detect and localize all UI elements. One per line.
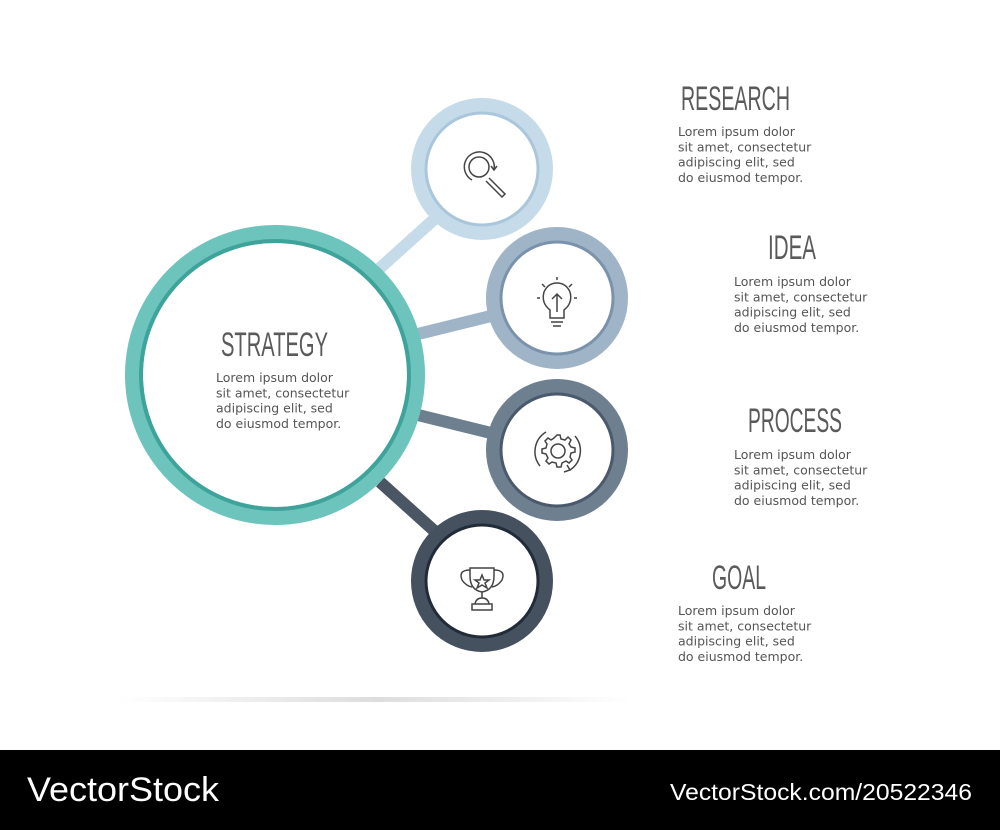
text: strategy: adipiscing elit, sed xyxy=(216,401,333,416)
heading: research: RESEARCH xyxy=(681,80,790,118)
text: strategy: do eiusmod tempor. xyxy=(216,416,341,431)
text: idea: sit amet, consectetur xyxy=(734,289,868,304)
text: research: sit amet, consectetur xyxy=(678,139,812,154)
heading: strategy: STRATEGY xyxy=(221,326,328,364)
footer logo: VectorStock xyxy=(27,771,220,809)
connector: idea xyxy=(418,315,495,334)
text: process: adipiscing elit, sed xyxy=(734,478,851,493)
text: goal: sit amet, consectetur xyxy=(678,618,812,633)
heading: process: PROCESS xyxy=(748,402,842,440)
connector: process xyxy=(418,415,495,434)
text: strategy: Lorem ipsum dolor xyxy=(216,370,334,385)
text: research: Lorem ipsum dolor xyxy=(678,124,796,139)
circle: goal xyxy=(419,518,545,644)
icon: trophy xyxy=(461,568,503,610)
text: idea: adipiscing elit, sed xyxy=(734,305,851,320)
heading: goal: GOAL xyxy=(712,559,766,597)
footer bar xyxy=(0,750,1000,830)
text: goal: Lorem ipsum dolor xyxy=(678,603,796,618)
text: strategy: sit amet, consectetur xyxy=(216,385,350,400)
text: research: do eiusmod tempor. xyxy=(678,170,803,185)
connector: research xyxy=(380,214,440,268)
text: idea: do eiusmod tempor. xyxy=(734,320,859,335)
icon: bulb xyxy=(537,277,577,326)
text: process: sit amet, consectetur xyxy=(734,462,868,477)
text: process: do eiusmod tempor. xyxy=(734,493,859,508)
footer url: VectorStock.com/20522346 xyxy=(670,779,972,805)
circle: research xyxy=(419,106,545,232)
shadow xyxy=(120,697,630,702)
text: goal: do eiusmod tempor. xyxy=(678,649,803,664)
text: research: adipiscing elit, sed xyxy=(678,155,795,170)
circle: process xyxy=(494,387,620,513)
icon: gear xyxy=(535,432,580,472)
text: goal: adipiscing elit, sed xyxy=(678,634,795,649)
circle: idea xyxy=(494,235,620,361)
connector: goal xyxy=(380,482,440,536)
circle: strategy xyxy=(134,234,416,516)
heading: idea: IDEA xyxy=(768,229,816,267)
icon: magnifier xyxy=(464,152,505,197)
text: process: Lorem ipsum dolor xyxy=(734,447,852,462)
text: idea: Lorem ipsum dolor xyxy=(734,274,852,289)
